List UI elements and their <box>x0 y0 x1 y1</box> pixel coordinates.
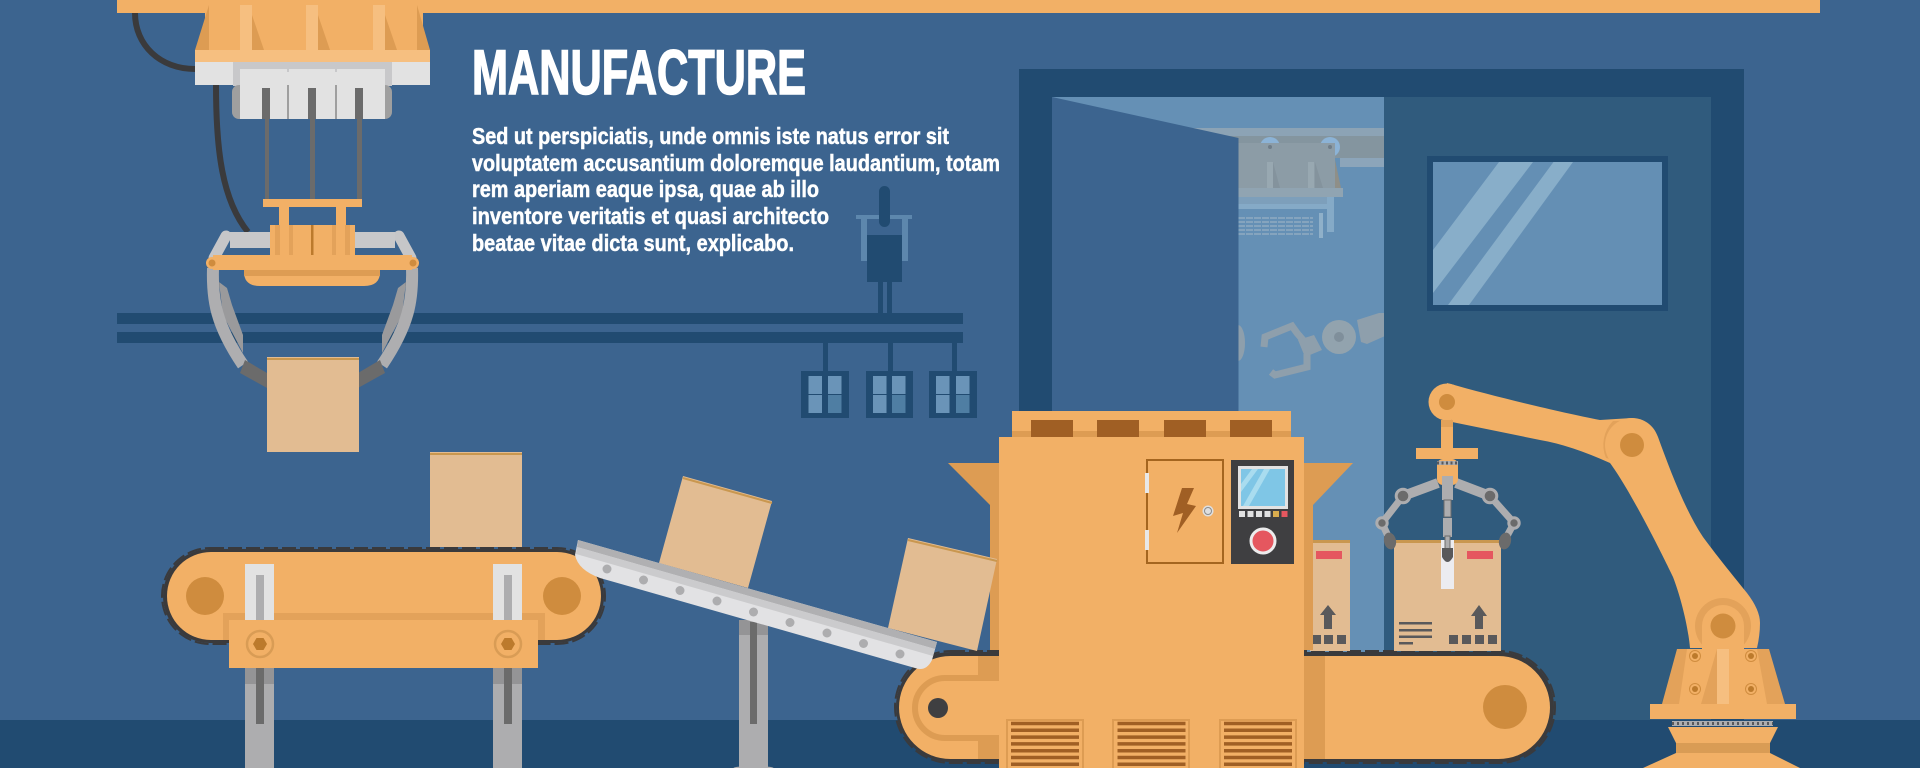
body text: voluptatem accusantium doloremque laudantium, totam <box>472 150 1000 176</box>
overhead rail <box>117 0 1820 13</box>
tilted boxes on chute <box>659 476 997 651</box>
hanging windowed lamps <box>801 343 977 418</box>
ghost machinery seen through the doorway <box>1190 128 1385 375</box>
elbow joint <box>1603 418 1659 472</box>
body text: rem aperiam eaque ipsa, quae ab illo <box>472 176 819 202</box>
right conveyor belt <box>895 651 1555 763</box>
floor <box>0 720 1920 768</box>
gripper right arm <box>358 236 412 388</box>
closed door panel <box>1384 97 1711 727</box>
machine side hoppers <box>948 463 1353 650</box>
conveyor legs <box>245 668 522 768</box>
boxes on right conveyor <box>1310 540 1501 651</box>
lower vents <box>1007 720 1296 768</box>
robot arm <box>1428 383 1800 768</box>
cables <box>135 13 248 232</box>
gripped box <box>1394 540 1501 651</box>
center plunger <box>1442 476 1453 562</box>
control panel <box>1231 460 1294 564</box>
gripper left arm <box>213 236 267 388</box>
overhead gripper holding box <box>206 199 419 452</box>
silhouette machine on rail <box>856 186 912 313</box>
body text: inventore veritatis et quasi architecto <box>472 203 829 229</box>
shoulder joint <box>1695 598 1751 654</box>
electric cabinet door <box>1145 460 1223 563</box>
body text <box>472 123 1000 256</box>
body text: beatae vitae dicta sunt, explicabo. <box>472 230 794 256</box>
body text: Sed ut perspiciatis, unde omnis iste natus error sit <box>472 123 949 149</box>
piston rods <box>262 88 363 199</box>
robot arm links <box>1447 383 1760 648</box>
ghost robot claw <box>1264 313 1385 375</box>
title: MANUFACTURE <box>472 38 806 108</box>
open door leaf <box>1052 97 1238 727</box>
door: factory doorway with open door and window <box>1019 69 1744 729</box>
robot gripper <box>1377 420 1519 562</box>
bolts <box>247 631 521 657</box>
partially hidden box <box>1310 540 1350 651</box>
inclined chute <box>575 540 937 669</box>
machine top hood <box>1012 411 1291 437</box>
chute leg <box>734 620 774 768</box>
wall rails <box>117 313 963 343</box>
door window <box>1427 156 1668 311</box>
gripper claws <box>1382 483 1514 536</box>
box on left conveyor <box>430 452 522 547</box>
held box <box>267 357 359 452</box>
packing machine <box>948 411 1353 768</box>
overhead press head <box>195 0 430 199</box>
left conveyor belt <box>162 548 605 768</box>
robot base <box>1643 649 1800 768</box>
